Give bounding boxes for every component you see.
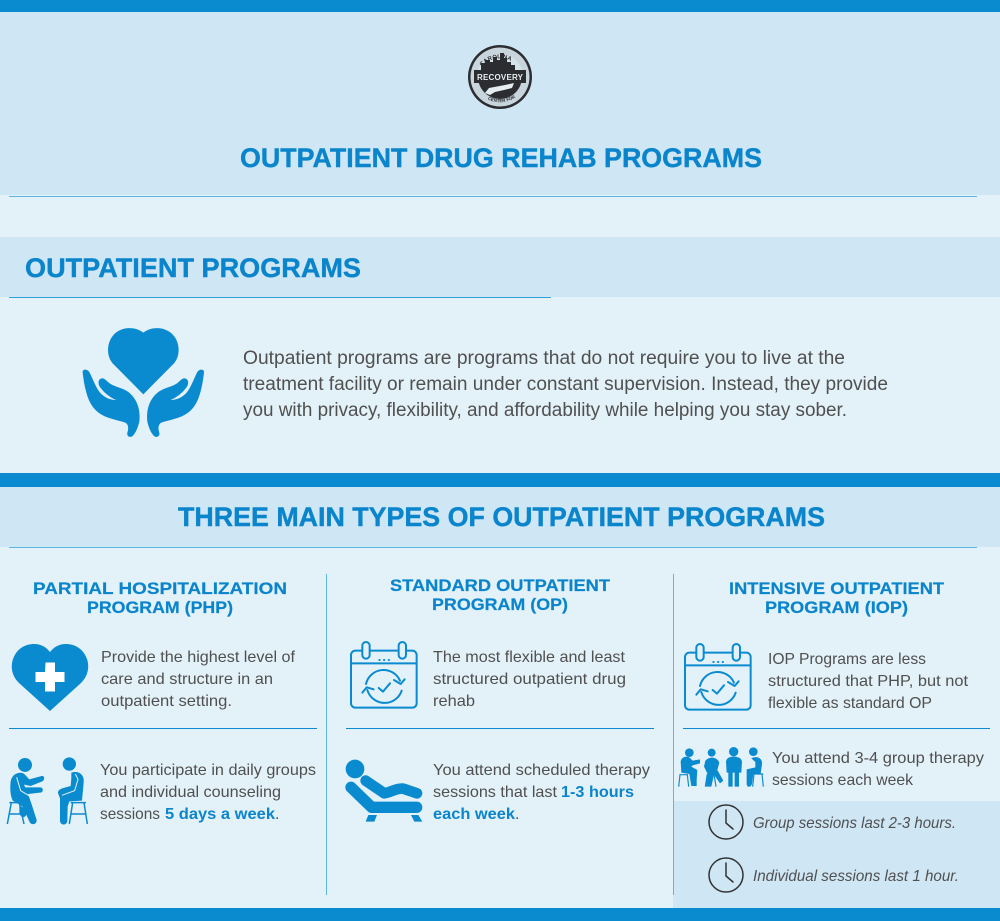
panel: intensive outpatient program bbox=[679, 579, 990, 789]
panel: partial hospitalization program: Provide the highest level of bbox=[101, 649, 296, 666]
panel: intensive outpatient program: sessions each week bbox=[772, 772, 914, 789]
intro text block: Outpatient programs are programs that do not require you to live at the bbox=[243, 348, 845, 369]
section heading band: three main types: THREE MAIN TYPES OF OUTPATIENT PROGRAMS bbox=[178, 502, 825, 532]
column heading: PARTIAL HOSPITALIZATION bbox=[33, 579, 287, 598]
top bar bbox=[0, 0, 1000, 12]
panel: partial hospitalization program bbox=[7, 579, 317, 825]
panel: standard outpatient program: PROGRAM (OP) bbox=[432, 595, 568, 614]
panel: partial hospitalization program: and individual counseling bbox=[100, 784, 281, 801]
column heading: STANDARD OUTPATIENT bbox=[390, 576, 611, 595]
icon: clock bbox=[709, 805, 743, 839]
intro text block: treatment facility or remain under constant supervision. Instead, they provide bbox=[243, 374, 888, 395]
panel: session lengths: Group sessions last 2-3 hours. bbox=[753, 815, 956, 832]
panel: partial hospitalization program: . bbox=[275, 806, 279, 823]
section heading band: three main types bbox=[0, 487, 1000, 548]
icon: calendar bbox=[351, 642, 417, 708]
panel: session lengths: Individual sessions last 1 hour. bbox=[753, 868, 959, 885]
title: OUTPATIENT DRUG REHAB PROGRAMS bbox=[240, 143, 762, 173]
panel: intensive outpatient program: You attend 3-4 group therapy bbox=[772, 750, 984, 767]
panel: standard outpatient program: You attend scheduled therapy bbox=[433, 762, 650, 779]
panel: partial hospitalization program: You participate in daily groups bbox=[100, 762, 316, 779]
column heading: INTENSIVE OUTPATIENT bbox=[729, 579, 945, 598]
intro text block: you with privacy, flexibility, and affordability while helping you stay sober. bbox=[243, 400, 847, 421]
intro text block bbox=[243, 348, 888, 421]
panel: standard outpatient program bbox=[346, 576, 654, 823]
icon: person reclining on therapy couch bbox=[346, 760, 422, 822]
icon: Carolina Recovery Center logo: CAROLINA bbox=[480, 54, 511, 66]
icon: clock bbox=[709, 858, 743, 892]
icon: group therapy circle bbox=[679, 747, 763, 787]
panel: standard outpatient program: 1-3 hours bbox=[561, 784, 634, 801]
panel: standard outpatient program: sessions that last bbox=[433, 784, 558, 801]
panel: standard outpatient program: rehab bbox=[433, 693, 475, 710]
divider bar bbox=[0, 473, 1000, 487]
panel: partial hospitalization program: 5 days a week bbox=[165, 806, 275, 823]
panel: standard outpatient program: The most flexible and least bbox=[433, 649, 626, 666]
icon: heart in hands bbox=[83, 328, 204, 437]
icon: heart with cross bbox=[12, 644, 88, 711]
panel: partial hospitalization program: care and structure in an bbox=[101, 671, 273, 688]
icon: Carolina Recovery Center logo: CENTER FOR bbox=[488, 95, 516, 102]
panel: session lengths bbox=[673, 801, 1000, 908]
panel: partial hospitalization program: outpatient setting. bbox=[101, 693, 232, 710]
panel: standard outpatient program: structured outpatient drug bbox=[433, 671, 626, 688]
icon: Carolina Recovery Center logo: RECOVERY bbox=[477, 73, 524, 82]
panel: partial hospitalization program: sessions bbox=[100, 806, 160, 823]
panel: standard outpatient program: each week bbox=[433, 806, 515, 823]
panel: intensive outpatient program: PROGRAM (IOP) bbox=[765, 598, 908, 617]
section heading band: outpatient programs bbox=[0, 237, 1000, 298]
panel: intensive outpatient program: structured that PHP, but not bbox=[768, 673, 969, 690]
panel: intensive outpatient program: IOP Programs are less bbox=[768, 651, 926, 668]
section heading band: outpatient programs: OUTPATIENT PROGRAMS bbox=[25, 253, 361, 283]
header panel bbox=[0, 12, 1000, 195]
bottom bar bbox=[0, 908, 1000, 921]
panel: intensive outpatient program: flexible as standard OP bbox=[768, 695, 932, 712]
panel: standard outpatient program: . bbox=[515, 806, 519, 823]
icon: calendar bbox=[685, 644, 751, 710]
panel: partial hospitalization program: PROGRAM (PHP) bbox=[87, 598, 233, 617]
icon: two people talking bbox=[7, 757, 87, 825]
icon: Carolina Recovery Center logo bbox=[468, 45, 532, 109]
